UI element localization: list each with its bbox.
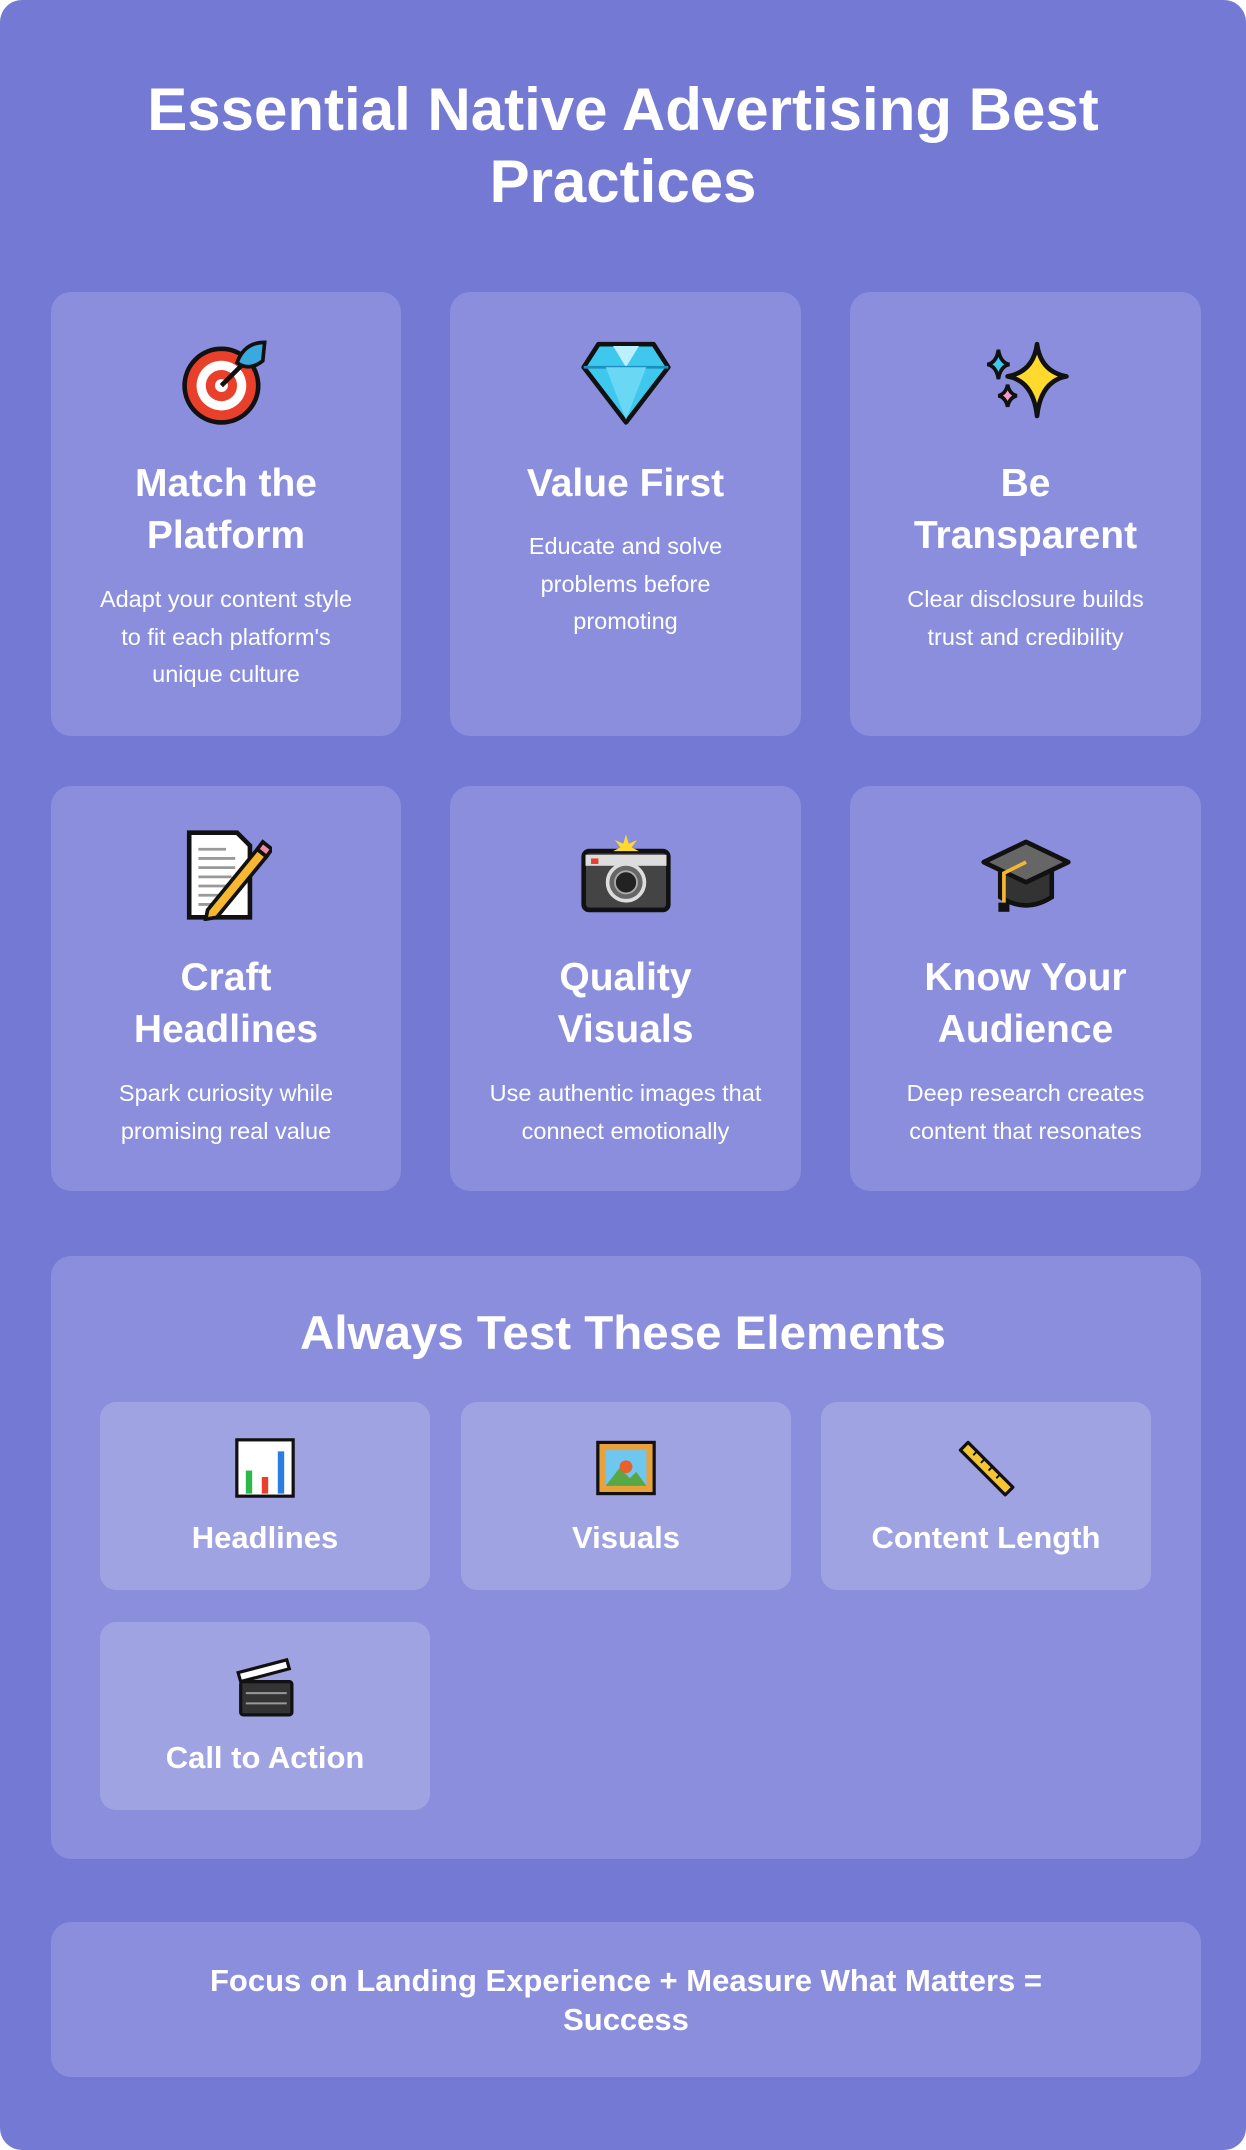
heading [558,956,693,1051]
text: Clear disclosure builds trust and credibility [907,586,1144,650]
heading [135,462,317,557]
test item: content length [821,1402,1151,1590]
footer callout: Focus on Landing Experience + Measure What Matters = [210,1963,1042,1998]
text: Adapt your content style to fit each platform's unique culture [100,586,352,687]
test item: content length: Content Length [871,1520,1100,1555]
title [147,76,1099,215]
footer callout: Success [563,2002,689,2037]
heading [134,956,318,1051]
text: Deep research creates content that resonates [907,1080,1144,1144]
heading: Transparent [914,514,1137,557]
heading: Value First [527,462,724,505]
title: Essential Native Advertising Best [147,76,1099,143]
panel: match the platform [51,292,401,736]
test item: visuals: Visuals [572,1520,680,1555]
heading: Platform [147,514,305,557]
heading [914,462,1137,557]
heading [924,956,1127,1051]
panel: quality visuals [450,786,801,1191]
panel: craft headlines [51,786,401,1191]
icon: gem [581,342,671,425]
title: Practices [490,148,756,215]
test item: call to action [100,1622,430,1810]
panel: know your audience [850,786,1201,1191]
test item: call to action: Call to Action [166,1740,364,1775]
icon: clapper board [236,1658,294,1716]
heading: Know Your [924,956,1127,999]
heading: Visuals [558,1008,693,1051]
icon: framed picture [596,1440,656,1496]
panel: be transparent [850,292,1201,736]
icon: ruler [958,1440,1015,1497]
icon: sparkles [987,342,1069,418]
heading: Quality [559,956,692,999]
heading: Audience [938,1008,1113,1051]
icon: bar chart [235,1438,295,1498]
test item: visuals [461,1402,791,1590]
footer callout [51,1922,1201,2077]
icon: graduation cap [981,840,1071,912]
heading: test elements: Always Test These Elements [300,1307,946,1360]
heading: Be [1001,462,1050,505]
panel: value first [450,292,801,736]
heading: Headlines [134,1008,318,1051]
icon: target [182,340,267,425]
text: Educate and solve problems before promoting [529,533,722,634]
heading: Match the [135,462,317,505]
heading: Craft [180,956,272,999]
text: Spark curiosity while promising real value [119,1080,333,1144]
test item: headlines [100,1402,430,1590]
icon: memo [186,830,272,921]
text: Use authentic images that connect emotionally [490,1080,761,1144]
icon: camera [581,834,671,912]
test item: headlines: Headlines [192,1520,338,1555]
panel: always test these elements [51,1256,1201,1859]
